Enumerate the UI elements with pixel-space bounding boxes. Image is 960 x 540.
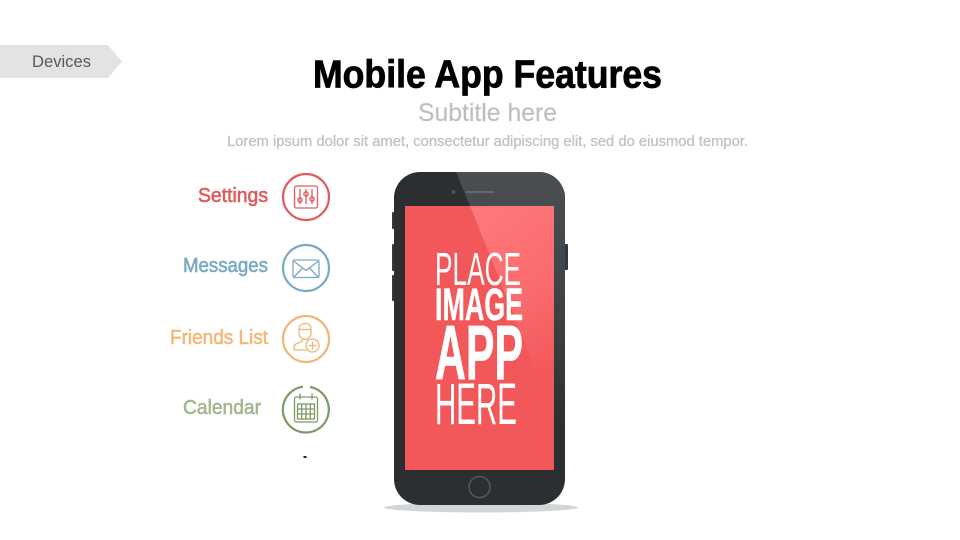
label: Friends List: Friends List: [170, 327, 268, 349]
icon: calendar: [283, 387, 329, 433]
phone mockup: [384, 172, 578, 512]
icon: envelope: [283, 245, 329, 291]
feature: Calendar: [183, 387, 329, 433]
title: Mobile App Features: [313, 54, 662, 96]
icon: sliders: [283, 174, 329, 220]
feature: Settings: [198, 174, 329, 220]
screen text: PLACE: [435, 243, 521, 295]
label: Messages: Messages: [183, 255, 268, 277]
screen text: APP: [435, 310, 523, 396]
label: Settings: Settings: [198, 185, 268, 207]
feature: Friends List: [170, 316, 329, 362]
small dot: [304, 456, 306, 458]
screen text: [435, 243, 523, 437]
feature: Messages: [183, 245, 329, 291]
section tag: Devices: [0, 45, 122, 78]
home button: [469, 476, 490, 498]
phone shadow: [384, 502, 578, 512]
screen text: HERE: [435, 372, 517, 437]
subtitle: Subtitle here: [418, 99, 557, 127]
phone screen: [405, 206, 554, 470]
section tag: Devices: Devices: [32, 53, 91, 71]
screen glare: [470, 206, 554, 415]
phone body glare: [456, 172, 565, 430]
icon: add friend: [283, 316, 329, 362]
screen text: IMAGE: [435, 279, 523, 330]
phone camera and speaker: [452, 190, 494, 194]
phone side buttons: [392, 212, 568, 301]
label: Calendar: Calendar: [183, 397, 261, 419]
phone body: [394, 172, 565, 505]
description text: Lorem ipsum dolor sit amet, consectetur adipiscing elit, sed do eiusmod tempor.: [227, 134, 748, 150]
